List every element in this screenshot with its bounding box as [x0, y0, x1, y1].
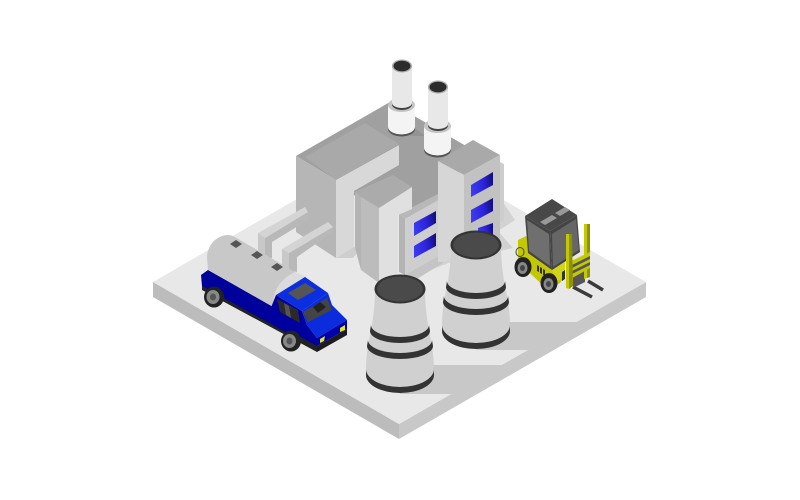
right block	[438, 140, 504, 262]
main roof	[296, 102, 473, 214]
forklift wheels	[514, 257, 532, 277]
middle block	[355, 175, 412, 283]
truck chassis	[202, 284, 317, 352]
windows	[414, 211, 436, 258]
truck cab	[270, 277, 347, 352]
cooling tower front	[366, 274, 434, 393]
raised roof panel	[305, 123, 399, 180]
pipes	[258, 207, 333, 272]
chimney 2	[424, 80, 451, 158]
tank	[207, 235, 307, 307]
forklift cab	[525, 199, 580, 270]
window wing	[399, 193, 451, 282]
side window	[277, 299, 300, 323]
factory building	[258, 60, 504, 283]
platform	[153, 140, 646, 439]
forklift	[514, 199, 603, 297]
chimney base shadow	[408, 128, 425, 136]
vent	[537, 265, 545, 276]
windshield	[303, 298, 332, 322]
truck rear wheel	[204, 286, 224, 308]
main left wall	[296, 156, 336, 258]
truck bed	[201, 270, 300, 340]
windows	[471, 172, 493, 245]
chimney 1	[388, 60, 415, 136]
main front wall	[336, 145, 399, 258]
truck front wheel	[281, 330, 301, 352]
roof hatch	[288, 283, 316, 300]
mast	[566, 224, 590, 289]
ground shadows	[400, 322, 578, 394]
tanker truck	[201, 235, 347, 352]
headlights	[320, 336, 325, 343]
forks	[573, 281, 603, 297]
cooling tower back	[442, 230, 510, 349]
forklift body	[516, 236, 565, 290]
